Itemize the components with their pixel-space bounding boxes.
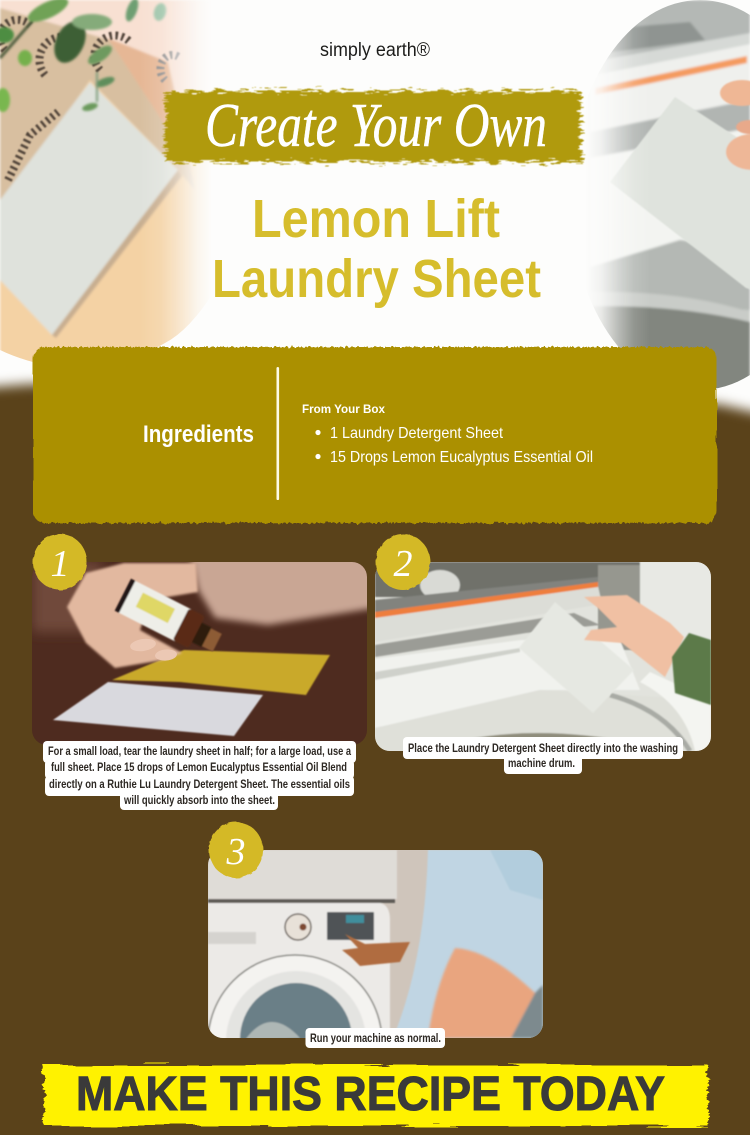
call to action banner: MAKE THIS RECIPE TODAY: [76, 1068, 665, 1121]
machine rim and drum: [375, 736, 390, 751]
pointing hand: [342, 934, 410, 966]
caption: step 3: Run your machine as normal.: [310, 1033, 441, 1045]
yellow recipe card: [112, 650, 330, 695]
caption: step 1: For a small load, tear the laundry sheet in half; for a large load, use a: [48, 746, 351, 758]
photo: step 1 pouring oil: [32, 555, 375, 745]
ingredient list: 15 Drops Lemon Eucalyptus Essential Oil: [330, 449, 593, 466]
subheading: from your box: From Your Box: [302, 402, 385, 416]
logo: simply earth: simply earth®: [320, 40, 430, 61]
green sleeve: [672, 633, 711, 705]
dial: [285, 914, 311, 940]
ingredient list: 1 Laundry Detergent Sheet: [330, 425, 503, 442]
caption: step 1: [43, 741, 356, 810]
caption: step 3: [306, 1028, 445, 1048]
caption: step 2: [403, 737, 683, 774]
white laundry sheet: [53, 682, 263, 736]
heading: ingredients: Ingredients: [143, 421, 254, 448]
fingers: [130, 638, 156, 652]
caption: step 2: machine drum.: [508, 758, 575, 770]
panel: ingredients: [33, 347, 717, 523]
caption: step 2: Place the Laundry Detergent Sheet directly into the washing: [408, 743, 678, 755]
hand: [584, 595, 684, 677]
photo: step 2 sheet into washer: [375, 562, 711, 751]
badge: step 1: 1: [50, 543, 70, 585]
badge: step 1: [33, 534, 87, 590]
control panel: [327, 912, 374, 940]
arm: [428, 948, 535, 1038]
photo: step 3 front-load washer: [208, 850, 543, 1038]
blurred hand: [190, 555, 375, 625]
washer body: [208, 903, 390, 1038]
title: Lemon Lift Laundry Sheet: Laundry Sheet: [212, 249, 541, 309]
badge: step 3: [209, 822, 263, 878]
white header background: [0, 0, 750, 416]
caption: step 1: full sheet. Place 15 drops of Lemon Eucalyptus Essential Oil Blend: [51, 762, 347, 774]
photo: sheet held over washer: [594, 0, 750, 388]
caption: step 1: will quickly absorb into the sheet.: [123, 795, 275, 807]
caption: step 1: directly on a Ruthie Lu Laundry Detergent Sheet. The essential oils: [49, 779, 350, 791]
badge: step 2: 2: [394, 543, 412, 585]
ingredient list: [315, 425, 593, 466]
door ring: [208, 954, 382, 1038]
badge: step 2: [376, 534, 430, 590]
paper sheet: [519, 602, 634, 713]
shirt: [393, 850, 543, 1038]
photo: laundry sheet on fabric: [0, 0, 215, 380]
oil bottle: [115, 579, 225, 659]
heading banner: Create Your Own: Create Your Own: [205, 92, 547, 160]
drum with clothes: [239, 982, 352, 1038]
washer top box: [208, 850, 397, 899]
divider: [276, 367, 279, 500]
badge: step 3: 3: [226, 831, 246, 873]
white lid: [375, 640, 640, 728]
hand: [67, 563, 198, 668]
warning label: [375, 586, 601, 618]
title: Lemon Lift Laundry Sheet: Lemon Lift: [252, 189, 500, 249]
title: Lemon Lift Laundry Sheet: [212, 189, 541, 309]
